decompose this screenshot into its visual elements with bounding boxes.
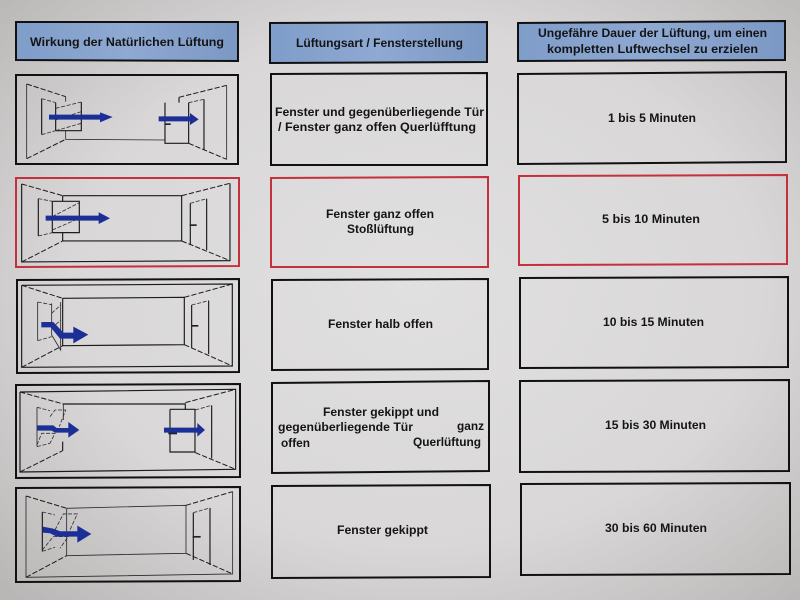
text box: row 4 ventilation type: Fenster gekippt und	[323, 407, 439, 419]
icon: tilted window	[37, 404, 66, 447]
text box: row 4 ventilation type: ganz	[457, 421, 484, 433]
panel: room diagram, window fully open	[16, 178, 239, 267]
column 1 heading: Wirkung der Natürlichen Lüftung	[30, 37, 224, 49]
column 2 heading	[270, 22, 487, 63]
text box: row 4 ventilation type: gegenüberliegende Tür	[278, 422, 414, 434]
arrow: airflow through window	[49, 112, 113, 122]
icon: closed door	[193, 508, 210, 565]
text box: row 1 ventilation type: Fenster und gegenüberliegende Tür	[275, 107, 485, 119]
arrow: airflow	[46, 212, 110, 224]
text box: row 5 duration	[521, 483, 790, 575]
text box: row 1 ventilation type: / Fenster ganz offen Querlüfftung	[278, 122, 476, 134]
text box: row 5 ventilation type: Fenster gekippt	[337, 525, 428, 537]
text box: row 4 ventilation type: Querlüftung	[413, 437, 481, 449]
column 1 heading	[16, 22, 238, 61]
text box: row 3 ventilation type	[272, 279, 488, 370]
text box: row 4 ventilation type	[272, 381, 489, 473]
panel: room diagram, tilted window with open door	[16, 384, 240, 478]
arrow: bent airflow	[41, 322, 88, 343]
arrow: airflow through tilted window	[37, 422, 79, 438]
text box: row 2 duration	[519, 175, 787, 265]
icon: closed door	[191, 301, 209, 354]
icon: half open window	[38, 302, 61, 350]
icon: closed door	[190, 199, 207, 250]
panel: room diagram, window half open	[17, 279, 239, 373]
icon: open door	[165, 97, 204, 150]
text box: row 5 ventilation type	[272, 485, 490, 578]
icon: open window	[42, 99, 81, 135]
text box: row 1 ventilation type	[271, 73, 487, 165]
text box: row 2 ventilation type	[271, 177, 488, 267]
text box: row 2 ventilation type: Fenster ganz offen	[326, 209, 434, 221]
icon: open window	[38, 199, 79, 236]
text box: row 4 duration: 15 bis 30 Minuten	[605, 420, 706, 432]
text box: row 2 duration: 5 bis 10 Minuten	[602, 214, 700, 226]
icon: tilted window	[42, 512, 77, 551]
arrow: airflow	[43, 526, 91, 543]
column 3 heading: Ungefähre Dauer der Lüftung, um einen	[538, 28, 767, 40]
text box: row 4 ventilation type: offen	[281, 438, 310, 450]
arrow: airflow through door	[164, 423, 205, 437]
text box: row 1 duration	[518, 72, 786, 164]
text box: row 5 duration: 30 bis 60 Minuten	[605, 523, 707, 535]
panel: room diagram, cross ventilation	[16, 75, 238, 164]
column 2 heading: Lüftungsart / Fensterstellung	[296, 38, 463, 50]
text box: row 4 duration	[520, 380, 789, 472]
text box: row 1 duration: 1 bis 5 Minuten	[608, 113, 696, 125]
icon: open door	[168, 405, 212, 458]
column 3 heading: kompletten Luftwechsel zu erzielen	[547, 44, 758, 56]
text box: row 3 duration: 10 bis 15 Minuten	[603, 317, 704, 329]
text box: row 3 ventilation type: Fenster halb offen	[328, 319, 433, 331]
panel: room diagram, tilted window	[16, 487, 240, 582]
text box: row 2 ventilation type: Stoßlüftung	[347, 224, 414, 236]
arrow: airflow through door	[159, 113, 199, 125]
column 3 heading	[518, 21, 785, 61]
text box: row 3 duration	[520, 277, 788, 368]
